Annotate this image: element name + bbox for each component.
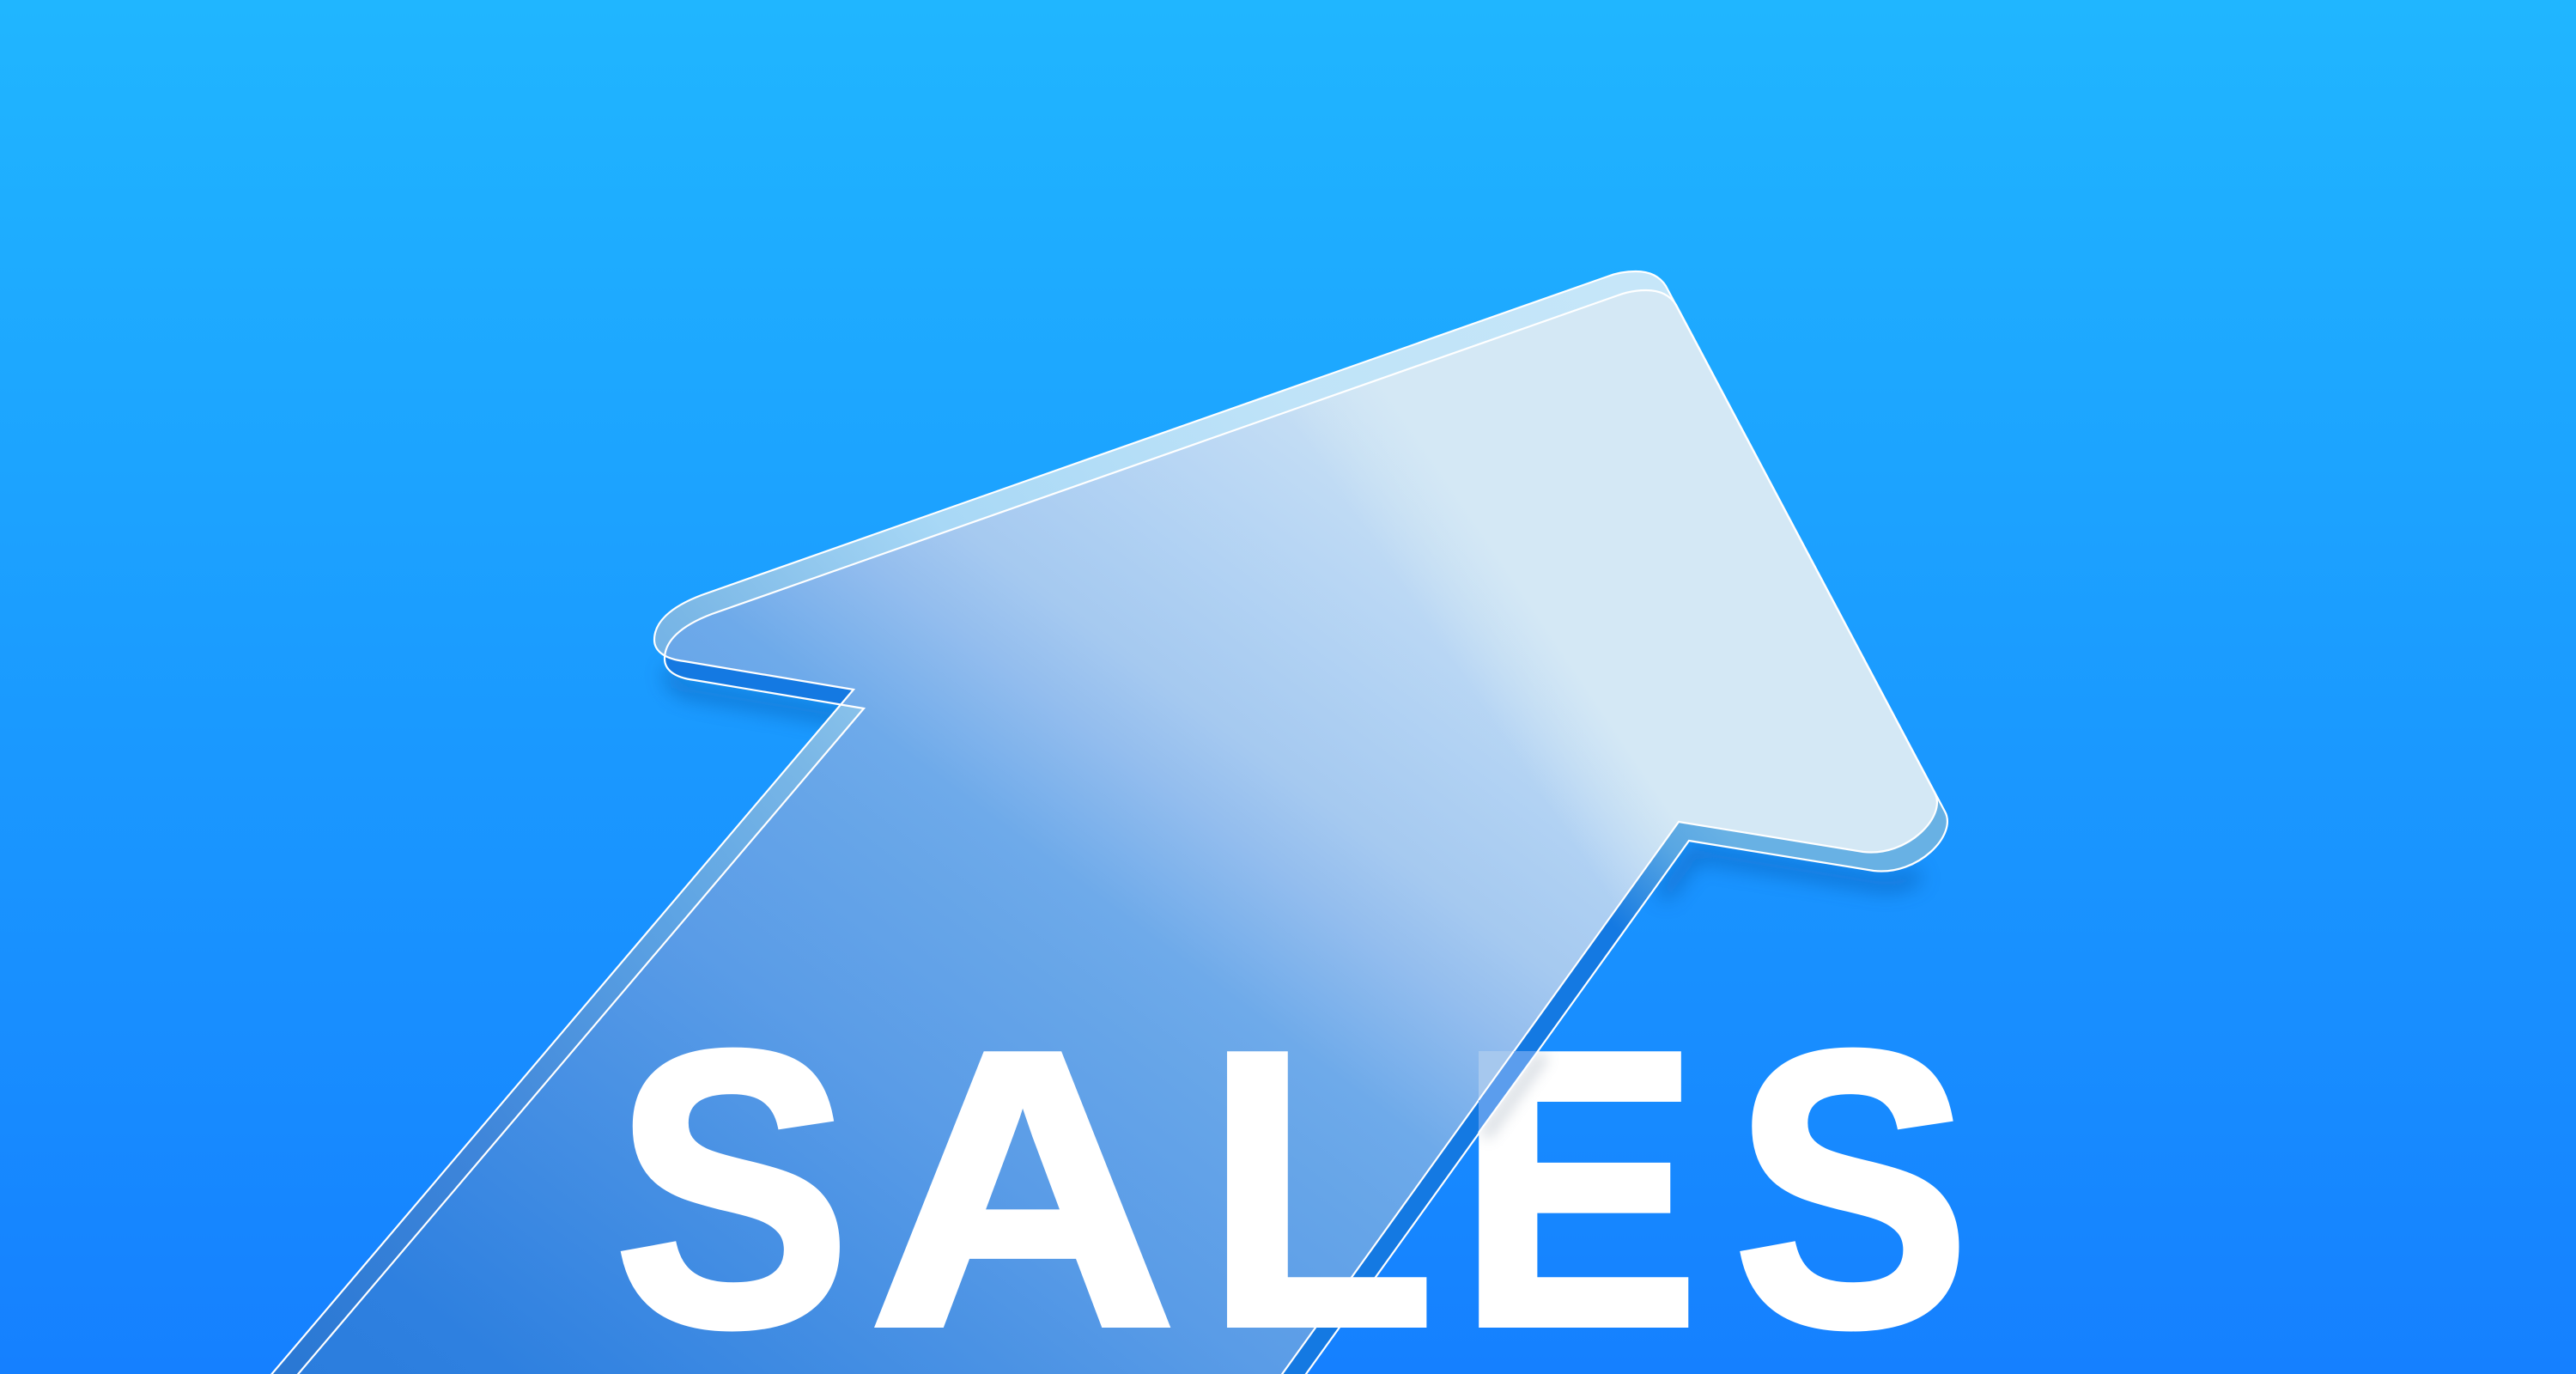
arrow shadow on letter E — [1485, 1055, 1544, 1136]
outlines over E — [1479, 1051, 1538, 1133]
arrow face with gradient and shine — [264, 271, 1937, 1374]
upper and left extrusion band — [273, 272, 1671, 1374]
arrow — [264, 271, 1947, 1374]
title: SALES — [614, 970, 1970, 1374]
translucent arrow face over E — [1479, 1051, 1514, 1100]
lower and right extrusion band — [665, 657, 1947, 1374]
white arrow outlines — [264, 271, 1947, 1374]
arrow overlap on letter E — [1479, 1051, 1544, 1136]
arrow drop shadow — [671, 669, 1918, 897]
translucent band over E — [1479, 1051, 1538, 1133]
